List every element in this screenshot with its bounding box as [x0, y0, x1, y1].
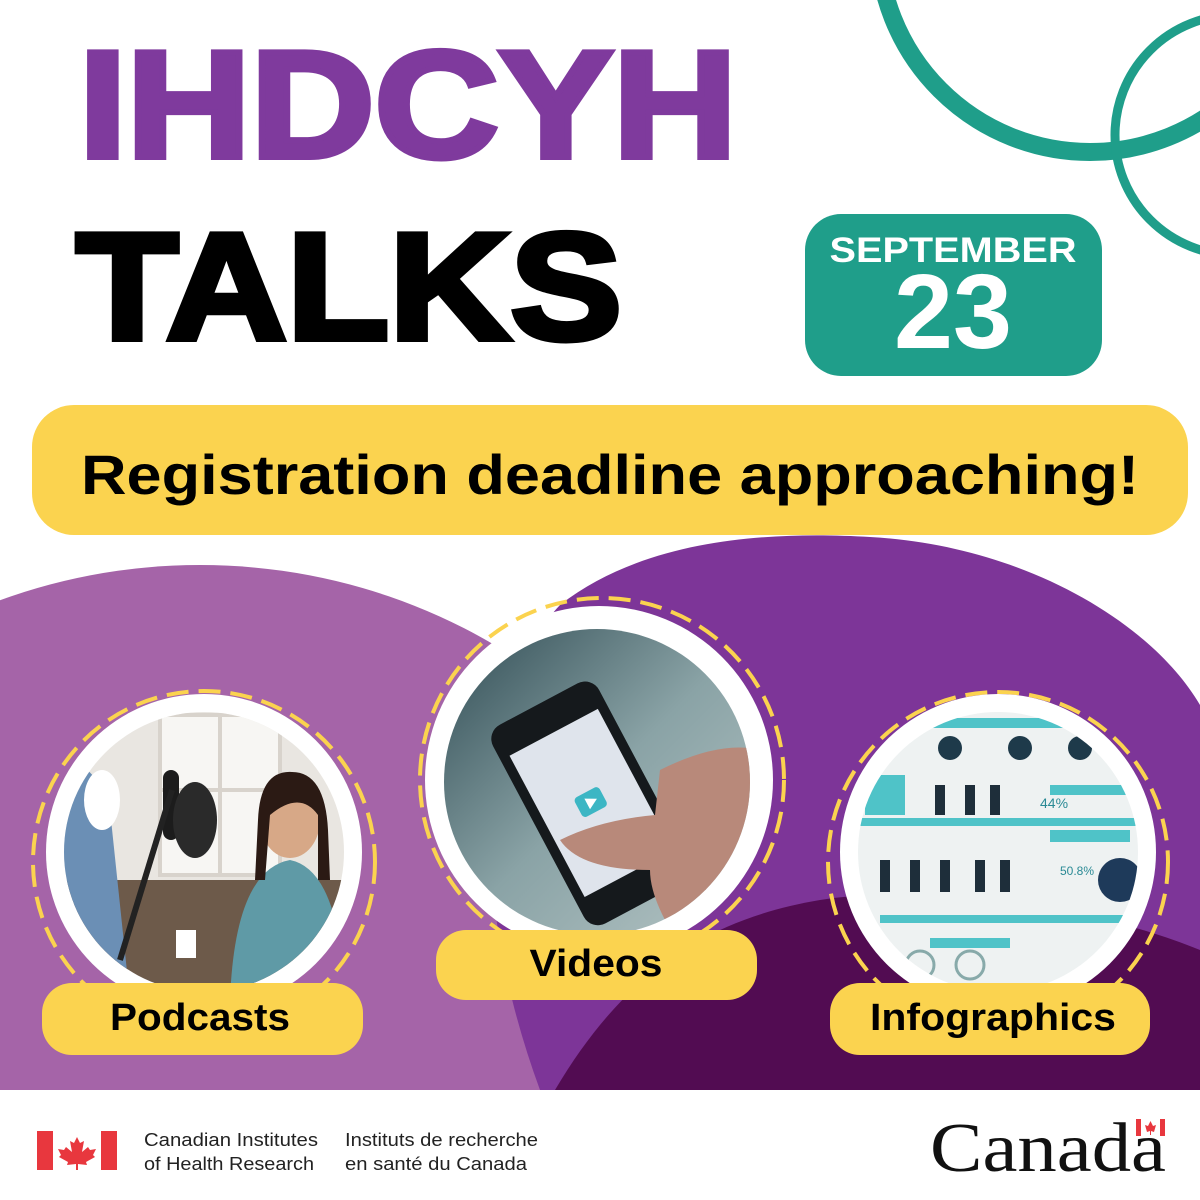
footer: en santé du Canada	[345, 1154, 528, 1174]
title: IHDCYH: IHDCYH	[79, 20, 737, 190]
text: IRSC French: Instituts de recherche	[345, 1130, 538, 1150]
circle: infographics photo	[826, 690, 1170, 983]
registration banner	[32, 405, 1188, 535]
date badge: 23	[894, 253, 1012, 371]
date badge	[805, 214, 1102, 376]
label: Infographics: Infographics	[870, 997, 1116, 1039]
icon: canadian flag	[37, 1131, 117, 1170]
wordmark: Canada: Canada	[930, 1110, 1166, 1187]
footer: of Health Research	[144, 1154, 314, 1174]
registration banner: Registration deadline approaching!	[81, 443, 1139, 506]
label: Videos: Videos	[530, 943, 662, 985]
footer	[0, 1090, 1200, 1200]
label: Podcasts	[42, 983, 363, 1055]
title: TALKS: TALKS	[76, 202, 622, 372]
circle: podcasts photo	[31, 689, 377, 983]
decorative teal rings	[878, 0, 1200, 255]
label: Videos	[436, 930, 757, 1000]
date badge: SEPTEMBER	[830, 231, 1076, 270]
circle: videos photo	[420, 598, 784, 962]
text: CIHR English: Canadian Institutes	[144, 1130, 318, 1150]
label: Infographics	[830, 983, 1150, 1055]
circle: infographics photo: 50.8%	[1060, 864, 1094, 878]
label: Podcasts: Podcasts	[110, 997, 290, 1039]
circle: infographics photo: 44%	[1040, 795, 1068, 811]
background shapes	[0, 535, 1200, 1090]
